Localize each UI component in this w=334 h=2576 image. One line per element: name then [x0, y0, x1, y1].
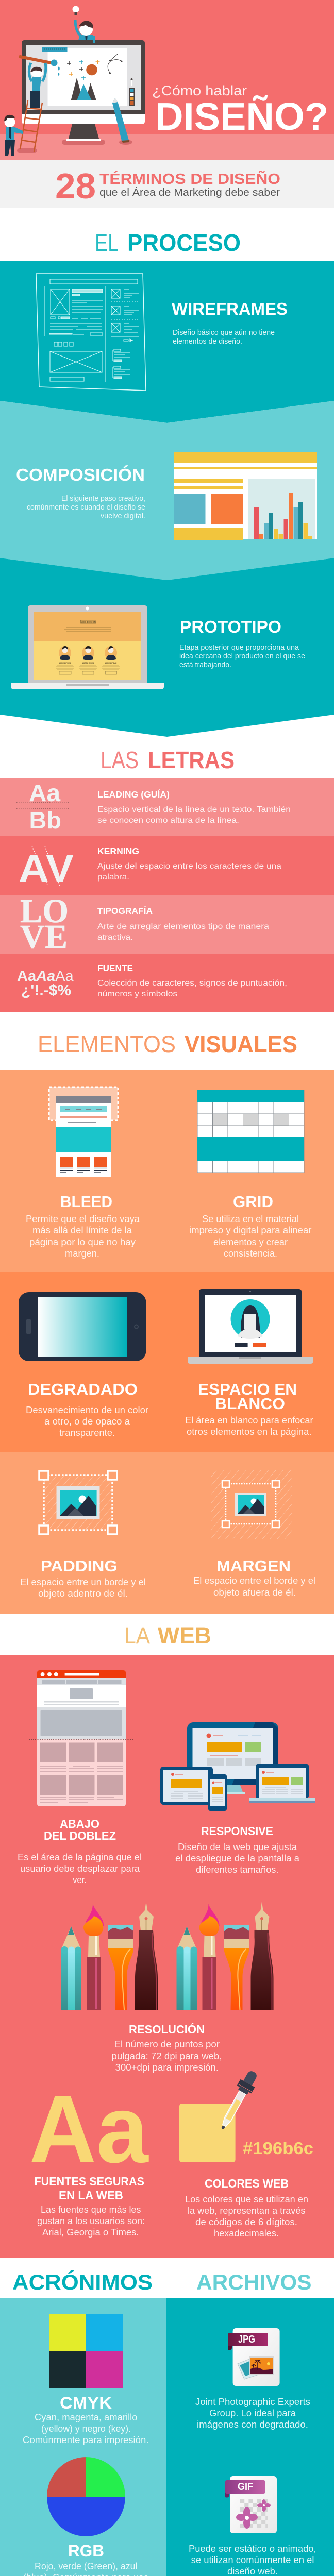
illustration: laptop with prototype: LOREM IPSUM: [59, 662, 71, 664]
figure: top designer with light bulb: [72, 6, 95, 43]
description: padding: objeto adentro de él.: [38, 1588, 128, 1599]
description: jpg: Group. Lo ideal para: [209, 2408, 296, 2418]
icon: jpg file: JPG: [238, 2334, 255, 2345]
description: margen: objeto afuera de él.: [213, 1587, 296, 1598]
panel: acrónimos: [0, 2298, 166, 2576]
panel: leading: [0, 778, 334, 836]
description: grid: elementos y crear: [213, 1237, 288, 1247]
description: grid: consistencia.: [224, 1248, 277, 1259]
heading: espacio en blanco: BLANCO: [215, 1395, 285, 1413]
heading: cmyk: CMYK: [60, 2394, 112, 2412]
description: fuentes seguras: Las fuentes que más les: [41, 2205, 141, 2215]
description: degradado: transparente.: [59, 1428, 115, 1438]
heading: composición: COMPOSICIÓN: [16, 465, 145, 484]
icon: kerning specimen: AV: [19, 846, 74, 890]
section heading: las letras: LAS: [101, 747, 139, 773]
description: espacio en blanco: [185, 1415, 313, 1437]
description: tipografía: Arte de arreglar elementos tipo de manera: [97, 922, 269, 931]
figure: designer on ladder: [29, 63, 46, 108]
description: fuente: [97, 979, 287, 998]
description: kerning: palabra.: [97, 873, 129, 882]
illustration: laptop with portrait: [188, 1289, 313, 1364]
description: abajo del doblez: usuario debe desplazar para: [20, 1863, 140, 1874]
description: cmyk: Cyan, magenta, amarillo: [35, 2412, 137, 2422]
description: gif: se utilizan comúnmente en el: [191, 2555, 314, 2565]
description: cmyk: [23, 2412, 148, 2445]
heading: abajo del doblez: [44, 1817, 116, 1842]
heading: fuentes seguras: FUENTES SEGURAS: [34, 2175, 144, 2188]
panel: la web: [0, 1655, 334, 2258]
heading: abajo del doblez: DEL DOBLEZ: [44, 1829, 116, 1842]
illustration: wireframe sketch: [36, 274, 146, 391]
description: fuentes seguras: Arial, Georgia o Times.: [42, 2227, 139, 2238]
illustration: page layout with bar chart: [174, 452, 317, 540]
illustration: below the fold browser: [29, 1670, 134, 1806]
description: responsive: Diseño de la web que ajusta: [178, 1842, 297, 1852]
heading: prototipo: PROTOTIPO: [180, 617, 281, 636]
description: composición: El siguiente paso creativo,: [61, 495, 145, 503]
description: margen: [193, 1575, 315, 1598]
description: leading: se conocen como altura de la línea.: [97, 816, 239, 825]
illustration: laptop with prototype: [11, 605, 164, 689]
icon: gif file: [225, 2476, 277, 2533]
illustration: laptop with prototype: LOREM IPSUM: [82, 662, 94, 664]
description: abajo del doblez: [18, 1852, 142, 1885]
description: bleed: Permite que el diseño vaya: [26, 1214, 140, 1224]
icon: jpg file: [228, 2328, 280, 2386]
icon: love lettering: [20, 892, 69, 956]
heading: margen: MARGEN: [216, 1557, 291, 1575]
description: espacio en blanco: otros elementos en la página.: [187, 1427, 311, 1437]
description: jpg: imágenes con degradado.: [197, 2419, 308, 2430]
heading: términos de diseño: TÉRMINOS DE DISEÑO: [99, 170, 280, 188]
illustration: margen: [211, 1470, 292, 1539]
description: jpg: [195, 2397, 310, 2430]
description: degradado: Desvanecimiento de un color: [26, 1405, 148, 1415]
icon: leading specimen: Bb: [29, 807, 61, 834]
description: tipografía: atractiva.: [97, 933, 133, 942]
description: prototipo: está trabajando.: [179, 661, 231, 669]
illustration: colour swatch with dropper: [179, 2068, 261, 2162]
description: composición: vuelve digital.: [101, 512, 145, 520]
description: grid: [189, 1214, 311, 1259]
label: hex code: #196b6c: [243, 2139, 313, 2158]
icon: font specimen: AaAaAa: [17, 968, 74, 985]
description: jpg: Joint Photographic Experts: [195, 2397, 310, 2407]
illustration: bleed page: [49, 1087, 118, 1177]
description: bleed: más allá del límite de la: [32, 1225, 132, 1235]
section heading: elementos visuales: ELEMENTOS: [38, 1031, 176, 1057]
description: fuentes seguras: [37, 2205, 145, 2238]
heading: colores web: COLORES WEB: [205, 2177, 289, 2190]
description: resolución: [111, 2039, 222, 2073]
icon: cmyk squares: [49, 2314, 123, 2388]
description: colores web: [185, 2194, 308, 2239]
section heading: el proceso: PROCESO: [127, 229, 241, 256]
description: degradado: [26, 1405, 148, 1438]
icon: love lettering: LO: [20, 892, 69, 930]
panel: kerning: [0, 836, 334, 895]
description: espacio en blanco: El área en blanco para enfocar: [185, 1415, 313, 1426]
description: colores web: hexadecimales.: [214, 2228, 279, 2239]
icon: gif file: GIF: [238, 2481, 253, 2493]
heading: grid: GRID: [233, 1193, 273, 1211]
description: padding: El espacio entre un borde y el: [20, 1577, 146, 1587]
description: fuentes seguras: gustan a los usuarios son:: [37, 2216, 145, 2226]
description: padding: [20, 1577, 146, 1599]
description: prototipo: [179, 643, 305, 669]
description: resolución: El número de puntos por: [114, 2039, 220, 2049]
description: wireframes: Diseño básico que aún no tiene: [173, 329, 275, 337]
description: abajo del doblez: ver.: [73, 1875, 87, 1885]
illustration: grid: [197, 1090, 304, 1173]
heading: responsive: RESPONSIVE: [201, 1824, 273, 1838]
heading: fuentes seguras: [34, 2175, 144, 2202]
description: bleed: [26, 1214, 140, 1259]
panel: fuente: [0, 954, 334, 1012]
description: bleed: página por lo que no hay: [29, 1237, 136, 1247]
description: grid: impreso y digital para alinear: [189, 1225, 311, 1235]
description: kerning: [97, 862, 281, 882]
description: leading: [97, 805, 291, 825]
description: tipografía: [97, 922, 269, 942]
heading: degradado: DEGRADADO: [28, 1380, 138, 1398]
description: resolución: pulgada: 72 dpi para web,: [111, 2051, 222, 2061]
section heading: la web: [124, 1622, 211, 1649]
icon: leading specimen: Aa: [29, 779, 60, 806]
description: wireframes: elementos de diseño.: [173, 337, 242, 346]
description: gif: [189, 2544, 316, 2576]
illustration: art tools, sharp set: [61, 1902, 158, 2010]
illustration: art tools, soft set: [176, 1902, 273, 2010]
description: degradado: a otro, o de opaco a: [44, 1416, 130, 1427]
description: fuente: Colección de caracteres, signos de puntuación,: [97, 979, 287, 988]
section heading: la web: WEB: [158, 1622, 211, 1649]
description: leading: Espacio vertical de la línea de un texto. También: [97, 805, 291, 814]
panel: wireframes: [0, 261, 334, 423]
illustration: phone with gradient: [19, 1292, 146, 1361]
description: composición: [27, 495, 145, 520]
description: cmyk: Comúnmente para impresión.: [23, 2435, 148, 2445]
illustration: responsive devices: [160, 1722, 315, 1811]
heading: abajo del doblez: ABAJO: [60, 1817, 99, 1831]
section heading: acrónimos: ACRÓNIMOS: [12, 2269, 153, 2294]
specimen: big Aa: Aa: [29, 2076, 149, 2183]
section heading: las letras: [101, 747, 235, 773]
heading: bleed: BLEED: [60, 1193, 112, 1211]
panel: padding and margen: [0, 1452, 334, 1614]
section heading: elementos visuales: VISUALES: [185, 1031, 297, 1057]
heading: kerning: KERNING: [97, 846, 139, 856]
heading: espacio en blanco: ESPACIO EN: [198, 1380, 297, 1398]
description: fuente: números y símbolos: [97, 990, 177, 998]
icon: font specimen: ¿'!.-$%: [21, 982, 71, 999]
description: wireframes: [173, 329, 275, 346]
icon: leading specimen: [16, 779, 70, 834]
panel: prototipo: [0, 558, 334, 737]
description: rgb: Rojo, verde (Green), azul: [35, 2561, 137, 2571]
description: composición: comúnmente es cuando el diseño se: [27, 503, 145, 512]
heading: fuente: FUENTE: [97, 963, 133, 973]
description: responsive: el despliegue de la pantalla a: [175, 1853, 300, 1863]
description: prototipo: Etapa posterior que proporciona una: [179, 643, 299, 652]
description: bleed: margen.: [65, 1248, 99, 1259]
description: grid: Se utiliza en el material: [202, 1214, 299, 1224]
section heading: las letras: LETRAS: [148, 747, 235, 773]
panel: tipografía: [0, 892, 334, 956]
section heading: la web: LA: [124, 1622, 150, 1649]
heading: padding: PADDING: [41, 1557, 118, 1575]
figure: designer holding ladder: [4, 115, 23, 156]
heading: ¿Cómo hablar: ¿Cómo hablar: [152, 83, 247, 98]
illustration: padding: [39, 1471, 117, 1534]
panel: bleed and grid: [0, 1070, 334, 1272]
illustration: laptop with prototype: LOREM IPSUM: [105, 662, 117, 664]
heading: rgb: RGB: [68, 2541, 104, 2560]
section heading: el proceso: EL: [95, 229, 119, 256]
section heading: elementos visuales: [38, 1031, 297, 1057]
panel: archivos: [166, 2298, 334, 2576]
description: responsive: diferentes tamaños.: [196, 1865, 278, 1875]
panel: subtitle band: [0, 160, 334, 208]
description: colores web: de códigos de 6 dígitos.: [195, 2217, 297, 2227]
icon: love lettering: VE: [20, 918, 68, 956]
heading: leading: LEADING (GUÍA): [97, 789, 170, 800]
description: rgb: [23, 2561, 148, 2576]
heading: resolución: RESOLUCIÓN: [129, 2022, 205, 2036]
description: cmyk: (yellow) y negro (key).: [41, 2424, 131, 2434]
figure: ladder: [20, 100, 42, 152]
panel: degradado and espacio en blanco: [0, 1272, 334, 1452]
description: gif: Puede ser estático o animado,: [189, 2544, 316, 2554]
section heading: archivos: ARCHIVOS: [196, 2270, 311, 2294]
description: abajo del doblez: Es el área de la página que el: [18, 1852, 142, 1862]
heading: tipografía: TIPOGRAFÍA: [97, 905, 153, 916]
description: resolución: 300+dpi para impresión.: [115, 2062, 219, 2073]
panel: hero: [0, 0, 334, 160]
icon: font specimen: [17, 968, 74, 999]
illustration: monitor with designers: [4, 6, 145, 156]
panel: composición: [0, 401, 334, 580]
description: kerning: Ajuste del espacio entre los caracteres de una: [97, 862, 281, 871]
description: colores web: la web, representan a través: [188, 2206, 305, 2216]
chart: rgb pie: [47, 2457, 125, 2536]
description: colores web: Los colores que se utilizan en: [185, 2194, 308, 2205]
description: responsive: [175, 1842, 300, 1875]
description: margen: El espacio entre el borde y el: [193, 1575, 315, 1586]
heading: wireframes: WIREFRAMES: [172, 299, 288, 318]
heading: espacio en blanco: [198, 1380, 297, 1413]
description: prototipo: idea cercana del producto en el que se: [179, 652, 305, 660]
number: 28: 28: [55, 166, 96, 206]
heading: fuentes seguras: EN LA WEB: [59, 2189, 123, 2202]
illustration: laptop with prototype: WEB DESIGN: [81, 621, 96, 623]
subheading: que el Área de Marketing debe saber: [99, 187, 280, 198]
heading: DISEÑO?: DISEÑO?: [155, 95, 328, 138]
